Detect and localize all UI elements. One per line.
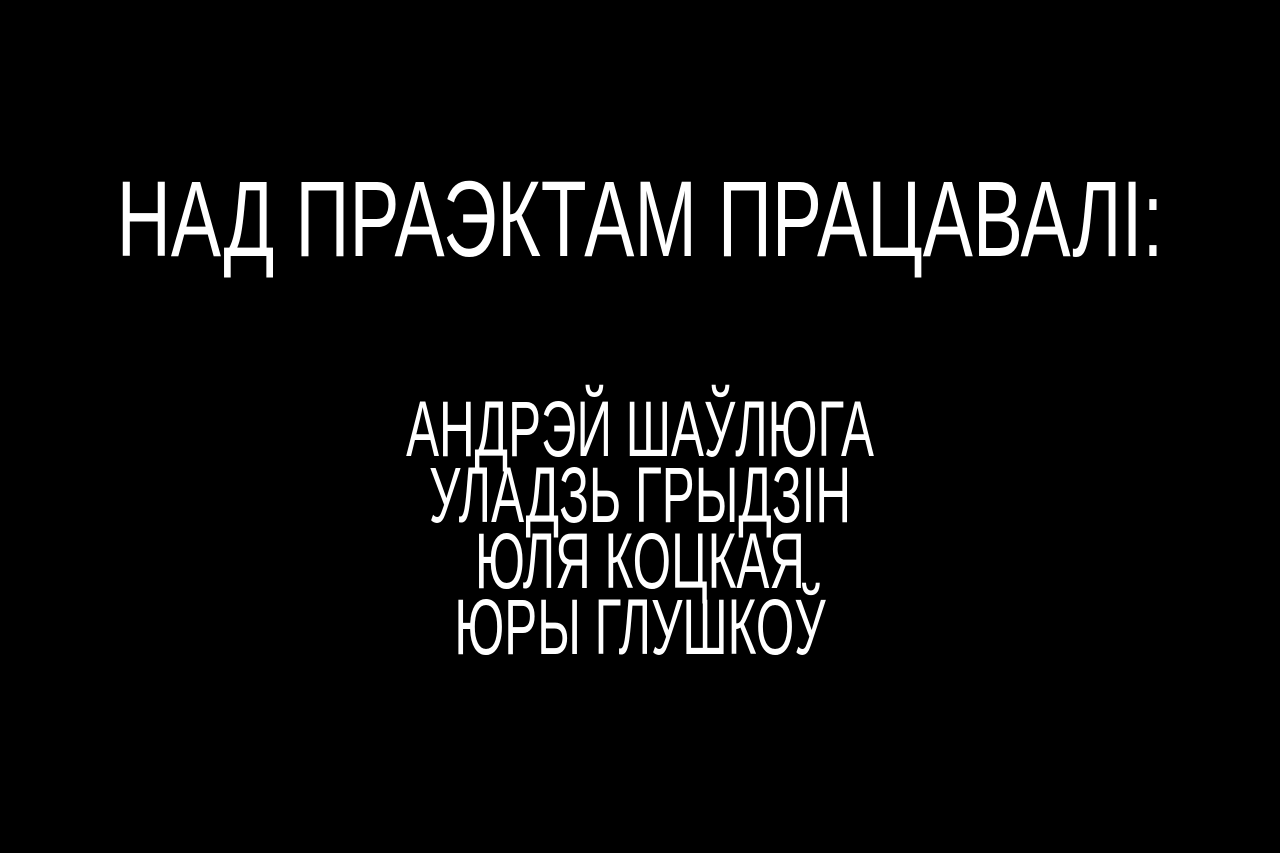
name 1: АНДРЭЙ ШАЎЛЮГА [406,384,874,473]
name 2: УЛАДЗЬ ГРЫДЗІН [429,450,851,539]
name 4: ЮРЫ ГЛУШКОЎ [454,582,826,671]
text block: names [406,384,874,671]
name 3: ЮЛЯ КОЦКАЯ [475,516,805,605]
title: НАД ПРАЭКТАМ ПРАЦАВАЛІ: [117,158,1163,279]
